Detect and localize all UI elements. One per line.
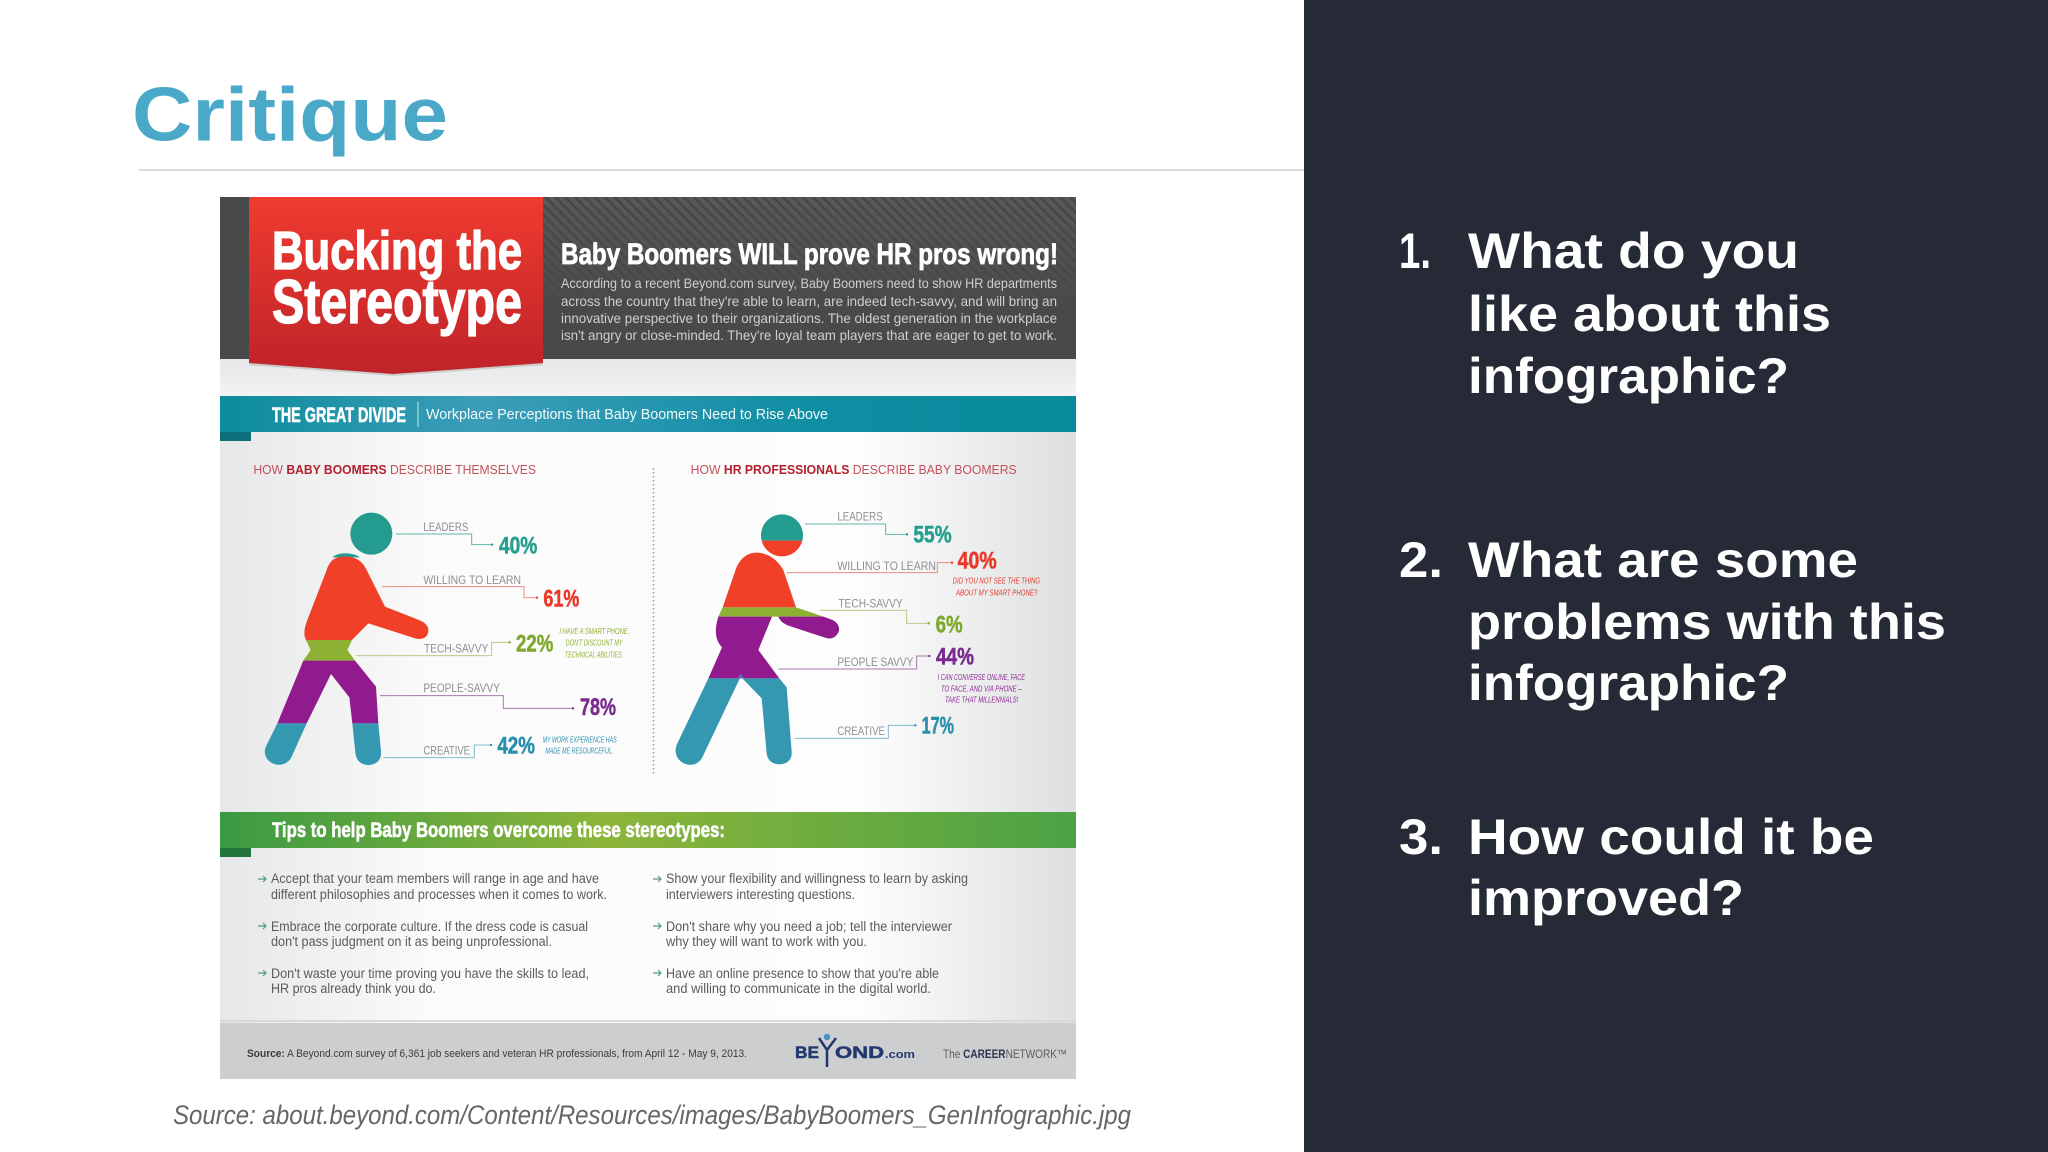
- logo: Beyond.com: .com: [885, 1049, 915, 1061]
- title: Critique: [132, 72, 448, 158]
- tips: right column: Have an online presence to show that you're able: [666, 966, 939, 981]
- question 1: like about this: [1468, 286, 1831, 342]
- callout: creative 42%: [383, 732, 617, 759]
- question 3: [1399, 809, 1874, 926]
- callout: people-savvy 78%: 78%: [580, 694, 616, 721]
- question 3: improved?: [1468, 870, 1744, 926]
- header subheading: Baby Boomers WILL prove HR pros wrong!: [561, 238, 1058, 271]
- callout: creative 17%: 17%: [922, 712, 954, 739]
- callout: willing to learn 40%: WILLING TO LEARN: [837, 559, 936, 573]
- tips: right column: interviewers interesting questions.: [666, 887, 855, 902]
- callout: people-savvy 78%: PEOPLE-SAVVY: [423, 681, 500, 695]
- callout: creative 17%: CREATIVE: [837, 724, 885, 738]
- callout: willing to learn 40%: 40%: [958, 547, 997, 574]
- section band: tips: [220, 812, 1076, 857]
- panel: how baby boomers describe themselves: [253, 463, 629, 765]
- callout: leaders 40%: LEADERS: [423, 520, 468, 534]
- callout: people savvy 44%: PEOPLE SAVVY: [837, 655, 913, 669]
- footer band: [220, 1020, 1076, 1079]
- header intro text: innovative perspective to their organizations. The oldest generation in the workplace: [561, 310, 1057, 326]
- heading ribbon: Bucking the Stereotype: Bucking the: [272, 221, 522, 281]
- heading ribbon: Bucking the Stereotype: [249, 197, 543, 376]
- callout: willing to learn 40%: ABOUT MY SMART PHONE?: [955, 588, 1038, 598]
- question 2: What are some: [1468, 532, 1858, 588]
- question 2: problems with this: [1468, 594, 1946, 650]
- callout: tech-savvy 22%: DON'T DISCOUNT MY: [566, 637, 624, 647]
- question 2: [1399, 532, 1946, 711]
- callout: tech-savvy 22%: I HAVE A SMART PHONE,: [559, 626, 629, 636]
- callout: willing to learn 40%: DID YOU NOT SEE THE THING: [953, 575, 1040, 585]
- column heading: HOW BABY BOOMERS DESCRIBE THEMSELVES: [253, 463, 536, 477]
- tips: right column: [653, 871, 968, 996]
- infographic background: [220, 197, 1076, 1079]
- tips: left column: different philosophies and processes when it comes to work.: [271, 887, 607, 902]
- header intro text: [561, 275, 1057, 343]
- panel: dark questions sidebar: [1304, 0, 2048, 1152]
- figure: boomer self-image: [265, 513, 428, 765]
- header intro text: According to a recent Beyond.com survey, Baby Boomers need to show HR departments: [561, 275, 1057, 291]
- callout: willing to learn 40%: [787, 547, 1040, 598]
- question 1: 1.: [1399, 223, 1431, 279]
- callout: creative 17%: [795, 712, 954, 739]
- tips: left column: Accept that your team members will range in age and have: [271, 871, 599, 886]
- question 3: 3.: [1399, 809, 1443, 865]
- tips: left column: Don't waste your time proving you have the skills to lead,: [271, 966, 589, 981]
- callout: tech-savvy 22%: 22%: [516, 631, 553, 658]
- logo: Beyond.com: [795, 1034, 915, 1067]
- heading ribbon: Bucking the Stereotype: Stereotype: [272, 268, 522, 337]
- callout: leaders 55%: LEADERS: [837, 510, 883, 524]
- logo: Beyond.com: BE: [795, 1044, 819, 1062]
- section band: The Great Divide: THE GREAT DIVIDE: [272, 404, 406, 427]
- question 1: infographic?: [1468, 348, 1789, 404]
- tips: left column: don't pass judgment on it as being unprofessional.: [271, 934, 552, 949]
- question 2: 2.: [1399, 532, 1443, 588]
- callout: creative 42%: MADE ME RESOURCEFUL.: [545, 745, 613, 755]
- callout: tech-savvy 6%: 6%: [936, 611, 963, 638]
- question 3: How could it be: [1468, 809, 1874, 865]
- title rule: [139, 169, 1304, 171]
- callout: people savvy 44%: I CAN CONVERSE ONLINE, FACE: [938, 672, 1025, 682]
- logo: The Career Network: The CAREERNETWORK™: [943, 1047, 1067, 1061]
- callout: creative 42%: CREATIVE: [423, 744, 470, 758]
- callout: tech-savvy 22%: TECH-SAVVY: [424, 641, 488, 655]
- callout: people-savvy 78%: [380, 681, 616, 721]
- callout: people savvy 44%: [778, 643, 1025, 705]
- section band: tips: Tips to help Baby Boomers overcome these stereotypes:: [272, 819, 725, 842]
- column heading: HOW HR PROFESSIONALS DESCRIBE BABY BOOMERS: [691, 463, 1017, 477]
- callout: creative 42%: 42%: [497, 732, 535, 759]
- callout: tech-savvy 22%: [356, 626, 629, 659]
- figure: HR view of boomers: [676, 514, 839, 765]
- callout: leaders 40%: [396, 520, 537, 559]
- callout: tech-savvy 6%: TECH-SAVVY: [838, 596, 903, 610]
- callout: people savvy 44%: 44%: [936, 643, 974, 670]
- callout: leaders 40%: 40%: [499, 532, 537, 559]
- source caption: Source: about.beyond.com/Content/Resources/images/BabyBoomers_GenInfographic.jpg: [173, 1100, 1131, 1130]
- panel: infographic image: [220, 197, 1076, 1079]
- callout: leaders 55%: 55%: [913, 521, 952, 548]
- callout: creative 42%: MY WORK EXPERIENCE HAS: [543, 735, 617, 745]
- section band: The Great Divide: [220, 396, 1076, 441]
- tips: left column: Embrace the corporate culture. If the dress code is casual: [271, 919, 588, 934]
- question 2: infographic?: [1468, 655, 1789, 711]
- header intro text: isn't angry or close-minded. They're loyal team players that are eager to get to work.: [561, 327, 1057, 343]
- panel: how HR professionals describe baby boomers: [676, 463, 1040, 765]
- dotted column divider: [652, 468, 654, 775]
- tips: right column: Don't share why you need a job; tell the interviewer: [666, 919, 952, 934]
- callout: willing to learn 61%: [382, 573, 579, 613]
- callout: people savvy 44%: TAKE THAT MILLENNIALS!: [945, 695, 1019, 705]
- question 1: What do you: [1468, 223, 1799, 279]
- callout: leaders 55%: [805, 510, 952, 548]
- tips: left column: HR pros already think you do.: [271, 981, 436, 996]
- source note: Source: A Beyond.com survey of 6,361 job seekers and veteran HR professionals, from April 12 - May 9, 2013.: [247, 1048, 747, 1060]
- panel: dark header band: [220, 197, 1076, 359]
- tips: right column: and willing to communicate in the digital world.: [666, 981, 931, 996]
- logo: Beyond.com: OND: [835, 1044, 884, 1062]
- tips: right column: why they will want to work with you.: [665, 934, 867, 949]
- callout: tech-savvy 6%: [820, 596, 963, 638]
- tips: left column: [258, 871, 607, 996]
- tips: right column: Show your flexibility and willingness to learn by asking: [666, 871, 968, 886]
- callout: willing to learn 61%: 61%: [543, 586, 579, 613]
- band below header: [220, 359, 1076, 396]
- header intro text: across the country that they're able to learn, are indeed tech-savvy, and will bring an: [561, 293, 1057, 309]
- callout: tech-savvy 22%: TECHNICAL ABILITIES.: [565, 649, 623, 659]
- callout: willing to learn 61%: WILLING TO LEARN: [423, 573, 521, 587]
- question 1: [1399, 223, 1831, 404]
- callout: people savvy 44%: TO FACE, AND VIA PHONE –: [941, 683, 1022, 693]
- section band: The Great Divide: Workplace Perceptions that Baby Boomers Need to Rise Above: [426, 406, 828, 423]
